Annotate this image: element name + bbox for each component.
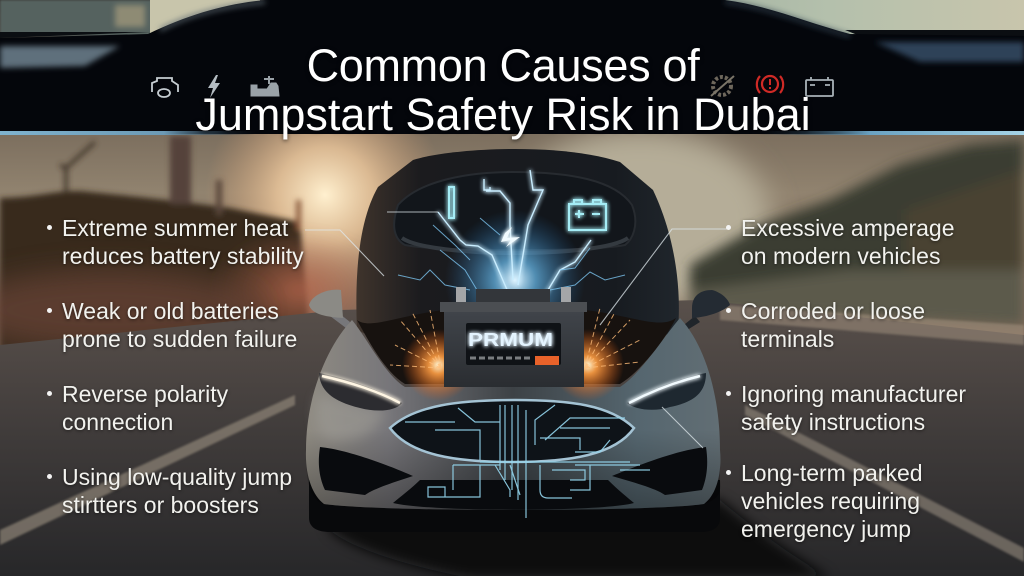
cause: corroded terminals: [741, 297, 925, 353]
left causes list: [47, 149, 816, 576]
undercarriage and tires: [309, 480, 720, 532]
engine bay: [357, 310, 676, 384]
front grille: [390, 400, 634, 462]
right sky haze: [510, 130, 770, 310]
title: Common Causes of: [307, 40, 699, 91]
lightning branches: [398, 218, 625, 295]
ground shadow: [320, 500, 830, 576]
dashboard blue edge: [0, 131, 1024, 135]
cause: weak batteries: prone to sudden failure: [62, 326, 297, 352]
cause: ignoring instructions: Ignoring manufacturer: [741, 381, 966, 407]
sky: [0, 0, 1024, 350]
right hills: [690, 140, 1024, 325]
callout lines: [305, 212, 729, 448]
car: [305, 149, 830, 576]
hood neon symbols: [449, 187, 606, 230]
right causes list: [726, 215, 966, 542]
cause: low-quality starters: [62, 463, 292, 519]
cause: long-term parked: vehicles requiring: [741, 488, 920, 514]
hood inner panel: [394, 172, 635, 250]
cause: reverse polarity: Reverse polarity: [62, 381, 228, 407]
battery label: PRMUM: [468, 330, 553, 350]
windshield reflections: [0, 0, 1024, 38]
road markings: [0, 305, 1024, 562]
cause: long-term parked: [741, 459, 923, 543]
cause: corroded terminals: terminals: [741, 326, 834, 352]
side mirrors: [309, 290, 730, 332]
cause: long-term parked: emergency jump: [741, 516, 911, 542]
cause: extreme heat: reduces battery stability: [62, 243, 304, 269]
dashboard warning icons: [152, 75, 833, 98]
body highlights: [316, 395, 385, 441]
title: Jumpstart Safety Risk in Dubai: [195, 89, 811, 140]
cause: low-quality starters: Using low-quality jump: [62, 464, 292, 490]
cause: corroded terminals: Corroded or loose: [741, 298, 925, 324]
title: [195, 40, 811, 144]
red haze left: [210, 230, 390, 350]
headlights: [319, 373, 402, 411]
dashboard highlights: [0, 2, 1024, 68]
lightning bolts: [438, 170, 591, 295]
cause: ignoring instructions: [741, 380, 966, 436]
circuit traces: [405, 405, 650, 518]
cause: weak batteries: Weak or old batteries: [62, 298, 279, 324]
cause: extreme heat: [62, 214, 304, 270]
battery: [440, 287, 587, 387]
cause: reverse polarity: [62, 380, 228, 436]
cause: weak batteries: [62, 297, 297, 353]
car body: [306, 318, 720, 510]
left silhouettes: [0, 136, 310, 350]
cause: long-term parked: Long-term parked: [741, 460, 923, 486]
cause: low-quality starters: stirtters or boosters: [62, 492, 259, 518]
blue glow in hood: [445, 210, 585, 350]
open hood underside: [356, 149, 679, 345]
cause: ignoring instructions: safety instructions: [741, 409, 925, 435]
cause: extreme heat: Extreme summer heat: [62, 215, 288, 241]
cause: excessive amperage: [741, 214, 954, 270]
sparks left and right: [402, 329, 474, 401]
dashboard: [0, 0, 1024, 134]
lower air intakes: [319, 447, 413, 495]
cause: excessive amperage: on modern vehicles: [741, 243, 940, 269]
cause: reverse polarity: connection: [62, 409, 173, 435]
sun glow: [205, 75, 445, 315]
cause: excessive amperage: Excessive amperage: [741, 215, 954, 241]
road: [0, 300, 1024, 576]
center bolt: [501, 227, 520, 247]
